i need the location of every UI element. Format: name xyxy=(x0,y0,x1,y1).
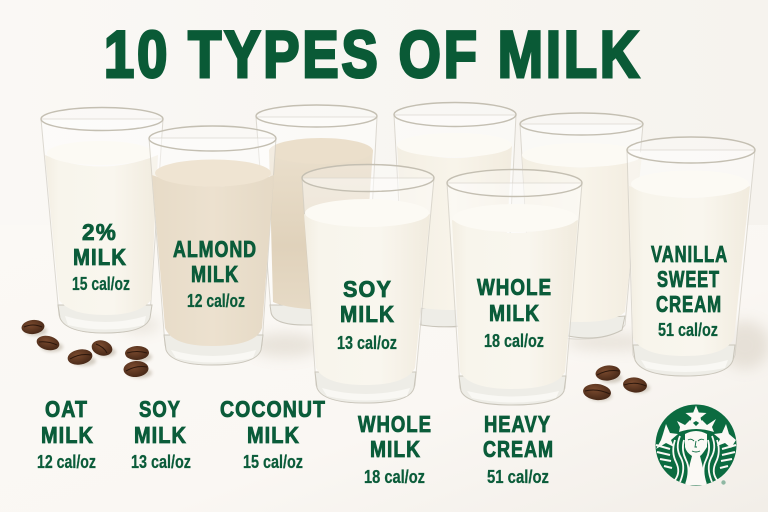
label: 2% milk xyxy=(72,219,130,294)
label: vanilla sweet cream: CREAM xyxy=(656,291,722,317)
label: oat milk: 12 cal/oz xyxy=(37,452,96,472)
label: whole milk bottom: MILK xyxy=(370,436,421,462)
glass: white back milk (centre) xyxy=(394,102,516,327)
label: almond milk: 12 cal/oz xyxy=(187,291,245,311)
registered mark dot xyxy=(721,480,726,485)
label: coconut milk: MILK xyxy=(247,422,300,448)
label: almond milk: MILK xyxy=(191,261,239,287)
label: heavy cream xyxy=(483,411,554,487)
label: whole milk xyxy=(477,274,552,351)
label: whole milk: WHOLE xyxy=(477,274,552,300)
label: coconut milk: 15 cal/oz xyxy=(243,452,303,472)
background table surface xyxy=(0,225,768,512)
crown xyxy=(677,419,716,432)
facial features xyxy=(688,439,704,452)
label: oat milk: MILK xyxy=(41,422,94,448)
label: whole milk bottom: WHOLE xyxy=(358,411,432,437)
label: almond milk: ALMOND xyxy=(173,236,257,262)
glass: 2% milk xyxy=(41,108,163,333)
label: whole milk bottom: 18 cal/oz xyxy=(364,467,425,487)
label: oat milk: OAT xyxy=(45,396,88,422)
label: soy milk bottom xyxy=(131,396,191,472)
label: heavy cream: 51 cal/oz xyxy=(487,467,549,487)
label: whole milk: 18 cal/oz xyxy=(484,331,544,351)
glass: white back milk (right) xyxy=(520,113,643,339)
side stars xyxy=(656,424,678,449)
label: whole milk bottom xyxy=(358,411,432,487)
label: coconut milk xyxy=(220,396,326,472)
label: soy milk: 13 cal/oz xyxy=(337,333,397,353)
icon: Starbucks-style siren logo xyxy=(656,404,736,486)
label: soy milk bottom: SOY xyxy=(139,396,181,422)
label: 2% milk: 15 cal/oz xyxy=(72,274,130,294)
label: soy milk xyxy=(337,276,397,353)
glass: soy milk xyxy=(302,164,434,403)
label: heavy cream: HEAVY xyxy=(484,411,551,437)
label: 2% milk: 2% xyxy=(82,219,117,245)
flowing hair xyxy=(673,436,719,484)
label: coconut milk: COCONUT xyxy=(220,396,326,422)
glass: vanilla sweet cream xyxy=(627,137,755,376)
label: whole milk: MILK xyxy=(489,300,540,326)
label: soy milk bottom: MILK xyxy=(134,422,187,448)
label: 2% milk: MILK xyxy=(73,244,127,270)
background wall xyxy=(0,0,768,226)
label: vanilla sweet cream xyxy=(651,241,728,340)
glass: whole milk xyxy=(447,170,582,405)
label: almond milk xyxy=(173,236,257,311)
coffee beans left xyxy=(21,319,152,378)
label: vanilla sweet cream: VANILLA xyxy=(651,241,728,267)
label: vanilla sweet cream: SWEET xyxy=(657,266,720,292)
label: soy milk: MILK xyxy=(340,301,395,327)
title: 10 TYPES OF MILK xyxy=(104,17,642,91)
table shadows xyxy=(120,318,768,369)
glass: almond milk xyxy=(149,126,276,365)
side ring stripes xyxy=(656,445,736,468)
coffee beans right xyxy=(582,364,650,401)
glass: tan back milk xyxy=(256,105,377,325)
label: oat milk xyxy=(37,396,96,472)
label: soy milk bottom: 13 cal/oz xyxy=(131,452,191,472)
face and torso xyxy=(685,431,707,485)
label: vanilla sweet cream: 51 cal/oz xyxy=(658,320,718,340)
label: soy milk: SOY xyxy=(343,276,392,302)
star on crown xyxy=(686,406,706,425)
label: heavy cream: CREAM xyxy=(483,436,554,462)
